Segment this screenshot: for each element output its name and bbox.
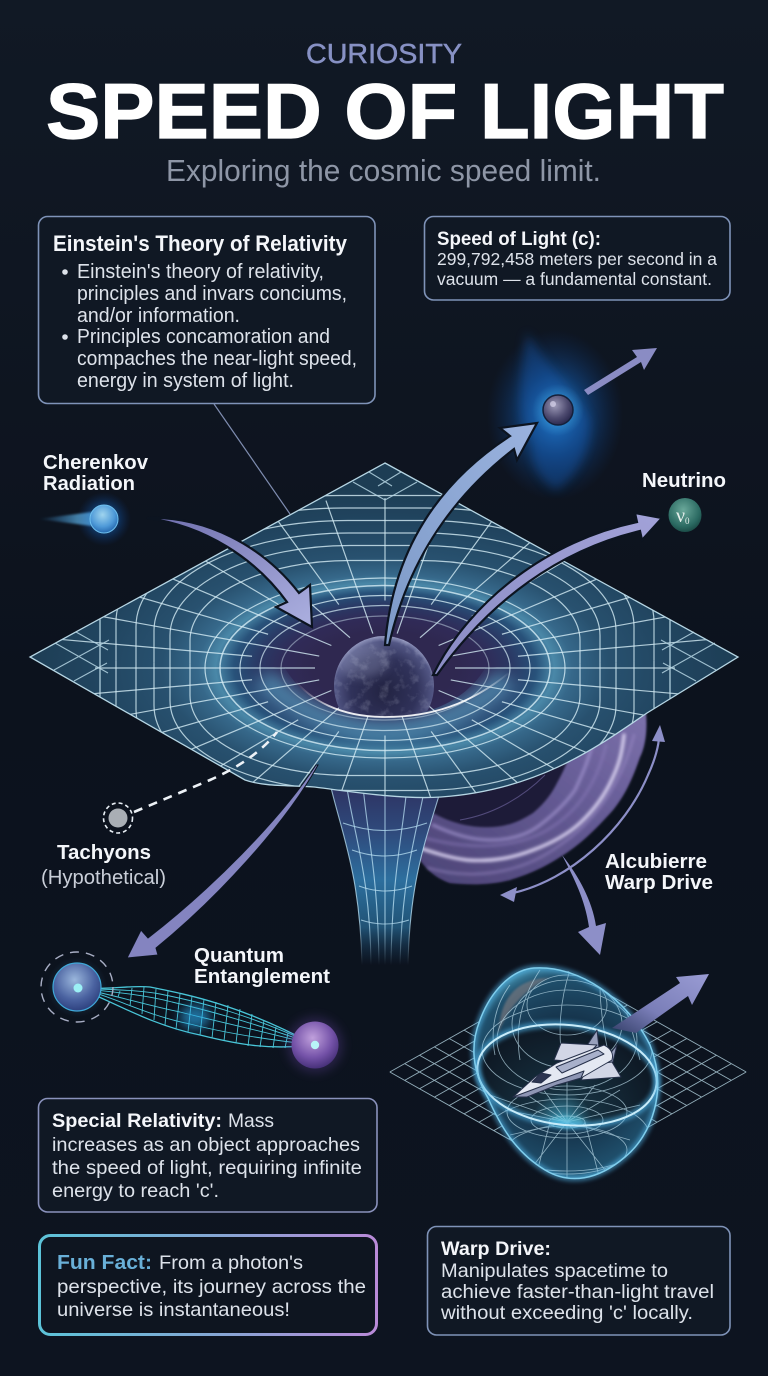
- label: Tachyons: Tachyons: [57, 841, 151, 864]
- panel: special relativity: the speed of light, requiring infinite: [52, 1157, 362, 1179]
- icon: Cherenkov particle: [38, 492, 131, 546]
- label: Neutrino: Neutrino: [642, 469, 726, 492]
- panel: special relativity: Special Relativity:: [52, 1110, 222, 1132]
- bullet list: Einstein's theory of relativity,: [77, 261, 324, 283]
- label: Tachyons: (Hypothetical): [41, 867, 166, 889]
- title: SPEED OF LIGHT: [46, 67, 724, 155]
- panel: fun fact: perspective, its journey across the: [57, 1276, 366, 1298]
- label: Quantum Entanglement: [194, 944, 330, 988]
- rim highlight: [293, 672, 510, 717]
- label: Alcubierre Warp Drive: Alcubierre: [605, 850, 707, 873]
- dashed tachyon trajectory: [134, 732, 277, 812]
- spacetime sheet: front lip: [116, 660, 654, 749]
- arrow: Cherenkov into well: [147, 518, 312, 627]
- icon: entangled mesh: [78, 987, 315, 1048]
- bullet list: Principles concamoration and: [77, 326, 330, 348]
- arrow: warp direction: [612, 974, 709, 1033]
- bullet list: compaches the near-light speed,: [77, 348, 357, 370]
- panel: fun fact: Fun Fact:: [57, 1251, 152, 1274]
- icon: right entangled particle: [287, 1017, 343, 1073]
- panel: fun fact: From a photon's: [159, 1252, 303, 1274]
- label: Cherenkov Radiation: Cherenkov: [43, 451, 149, 474]
- bubble equator ring: [472, 1016, 662, 1134]
- label: Alcubierre Warp Drive: Warp Drive: [605, 871, 713, 894]
- bullet list: energy in system of light.: [77, 370, 294, 392]
- icon: Tachyon: [104, 803, 132, 833]
- connector: panel to spacetime sheet: [214, 404, 290, 514]
- panel: special relativity: Mass: [228, 1110, 274, 1132]
- warp swirl behind the sheet: [417, 705, 646, 884]
- arrow: to quantum entanglement: [127, 765, 318, 958]
- subtitle: Exploring the cosmic speed limit.: [166, 153, 601, 188]
- quantum entanglement diagram: [41, 952, 343, 1073]
- label: Cherenkov Radiation: Radiation: [43, 472, 135, 495]
- label: Tachyons: [41, 841, 166, 889]
- spacetime sheet: back surface: [32, 464, 736, 712]
- warp bubble: [472, 968, 662, 1180]
- planet mass: [334, 636, 434, 716]
- sheet corner detail lines: [54, 472, 716, 693]
- panel: speed of light value: Speed of Light (c):: [437, 228, 601, 250]
- icon: left entangled particle: [41, 952, 113, 1022]
- label: Quantum Entanglement: Quantum: [194, 944, 284, 967]
- label: Cherenkov Radiation: [43, 451, 149, 495]
- funnel throat: [328, 775, 445, 965]
- panel: special relativity: [38, 1098, 377, 1212]
- sheet outline: [30, 463, 738, 798]
- curved two-way arrow around swirl: [500, 725, 665, 902]
- arrow: photon direction: [584, 348, 657, 395]
- panel: warp drive: without exceeding 'c' locally.: [440, 1303, 693, 1324]
- icon: spaceship: [513, 1030, 621, 1097]
- label: Alcubierre Warp Drive: [605, 850, 713, 894]
- panel: fun fact: universe is instantaneous!: [57, 1299, 290, 1321]
- bullet list: [62, 261, 357, 392]
- arrow: planet to neutrino: [433, 513, 662, 675]
- photon with blue flare: [487, 330, 623, 500]
- panel heading: Einstein's Theory of Relativity: [53, 231, 348, 256]
- panel: special relativity: energy to reach 'c'.: [52, 1180, 219, 1202]
- panel: fun fact: [40, 1236, 376, 1334]
- warp drive diagram: [390, 968, 746, 1180]
- kicker: Curiosity: CURIOSITY: [306, 38, 462, 69]
- panel: warp drive: Warp Drive:: [441, 1238, 551, 1260]
- icon: Neutrino: 0: [685, 516, 690, 526]
- arrow: planet to photon: [385, 423, 537, 645]
- bullet list: principles and invars conciums,: [77, 283, 347, 305]
- panel: speed of light value: 299,792,458 meters per second in a: [437, 249, 717, 269]
- panel: warp drive: [428, 1226, 730, 1335]
- panel: speed of light value: [424, 216, 730, 300]
- bullet list: and/or information.: [77, 305, 240, 327]
- icon: Neutrino: [668, 498, 702, 532]
- label: Quantum Entanglement: Entanglement: [194, 965, 330, 988]
- panel: Einstein's theory of relativity: [38, 216, 375, 404]
- panel: warp drive: Manipulates spacetime to: [441, 1261, 668, 1282]
- panel: special relativity: increases as an object approaches: [52, 1134, 360, 1156]
- icon: Neutrino: ν: [676, 505, 685, 527]
- arrow: to warp drive: [562, 855, 606, 955]
- flat spacetime grid: [390, 972, 746, 1172]
- panel: speed of light value: vacuum — a fundamental constant.: [437, 269, 712, 289]
- panel: warp drive: achieve faster-than-light travel: [441, 1282, 714, 1303]
